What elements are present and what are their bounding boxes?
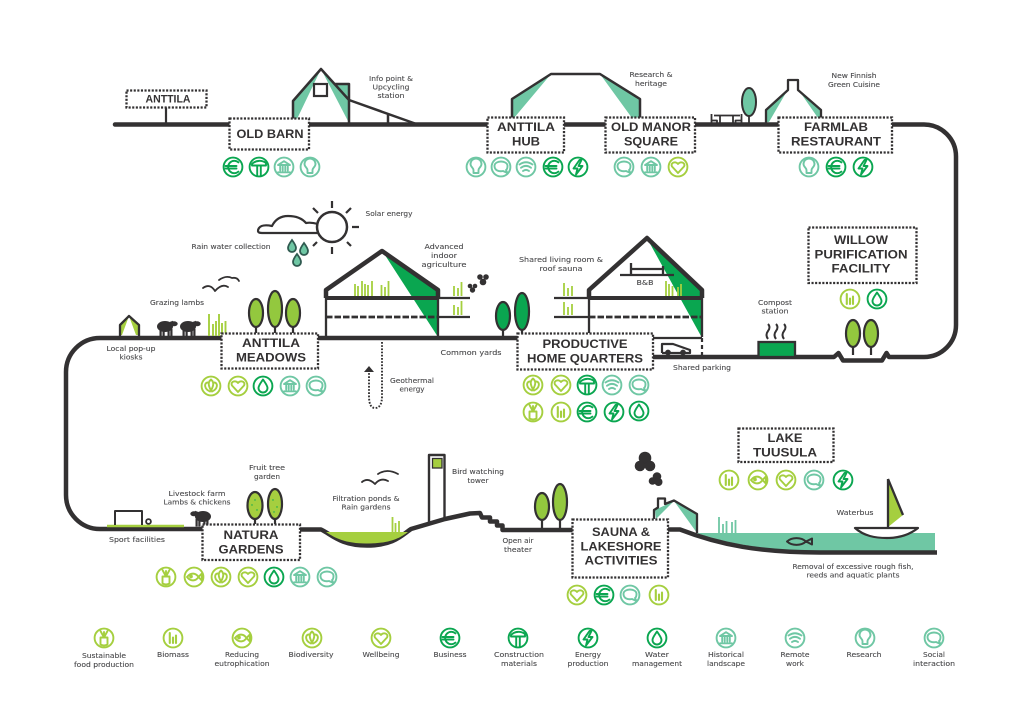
- label: Old Barn: OLD BARN: [236, 127, 304, 141]
- legend: research: [846, 629, 882, 659]
- legend: social interaction: [913, 629, 955, 668]
- caption: filtration ponds: Rain gardens: [342, 504, 391, 512]
- caption: open air theater: [502, 537, 534, 554]
- icon: willow trees: [846, 320, 878, 355]
- legend: social interaction: Social: [923, 651, 945, 659]
- label: Lake Tuusula: TUUSULA: [753, 446, 817, 460]
- legend: water management: [632, 629, 682, 668]
- legend: construction materials: materials: [501, 660, 538, 668]
- route line: top row to willow facility: [115, 124, 956, 360]
- icon row: old barn: [224, 158, 319, 176]
- icon: meadow trees: [249, 291, 300, 333]
- label: Anttila Meadows: MEADOWS: [236, 350, 306, 364]
- label: Lake Tuusula: [738, 428, 834, 462]
- icon: fruit trees: [248, 489, 282, 524]
- icon: meadow grass: [209, 314, 226, 336]
- caption: new finnish cuisine: New Finnish: [832, 72, 876, 80]
- label: Sauna and Lakeshore Activities: ACTIVITIES: [584, 554, 658, 568]
- caption: filtration ponds: [332, 495, 400, 512]
- caption: info point: station: [378, 92, 404, 100]
- filtration pond: [326, 532, 408, 544]
- legend: water management: Water: [645, 651, 669, 659]
- caption: research and heritage: [630, 71, 672, 88]
- legend: energy production: Energy: [575, 651, 601, 659]
- legend: historical landscape: [707, 629, 745, 668]
- caption: livestock farm: [164, 490, 231, 506]
- icon: common yard trees: [496, 293, 529, 338]
- label: Sauna and Lakeshore Activities: [572, 520, 668, 578]
- icon: theater trees: [535, 484, 567, 529]
- building: indoor agriculture house: [325, 251, 470, 337]
- legend: business: [434, 629, 467, 659]
- icon row: old manor: [615, 158, 687, 176]
- icon: compost bin: [758, 324, 795, 357]
- icon: rain drops: [288, 240, 308, 266]
- caption: lake removal: [792, 563, 914, 580]
- icon: birds: [203, 277, 239, 291]
- icon row: farmlab: [800, 158, 872, 176]
- icon: tree: [742, 88, 756, 124]
- icon row: lake: [720, 471, 852, 489]
- caption: grazing lambs: Grazing lambs: [150, 299, 205, 307]
- sign post: [165, 107, 167, 124]
- icon row: sauna: [568, 586, 668, 604]
- label: Willow Purification Facility: PURIFICATION: [814, 248, 908, 262]
- caption: research and heritage: heritage: [635, 80, 667, 88]
- legend: construction materials: [494, 629, 544, 668]
- caption: bird watching tower: [452, 468, 504, 485]
- legend: historical landscape: Historical: [708, 651, 744, 659]
- icon row: natura gardens: [157, 568, 336, 586]
- label: Anttila Hub: ANTTILA: [497, 120, 555, 134]
- caption: shared parking: Shared parking: [673, 364, 731, 372]
- icon: car: [662, 344, 690, 355]
- label: Farmlab Restaurant: RESTAURANT: [791, 134, 882, 148]
- caption: local kiosks: kiosks: [120, 354, 143, 362]
- caption: geothermal energy: energy: [400, 386, 425, 394]
- caption: new finnish cuisine: [828, 72, 880, 89]
- caption: info point: Upcycling: [372, 84, 410, 92]
- caption: local kiosks: Local pop-up: [106, 345, 156, 353]
- caption: lake removal: Removal of excessive rough fish,: [792, 563, 914, 571]
- legend: sustainable food production: Sustainable: [82, 652, 126, 660]
- caption: rain water collection: Rain water collection: [192, 243, 270, 251]
- label: Old Manor Square: [606, 118, 695, 152]
- legend: sustainable food production: [74, 629, 134, 669]
- icon rows: productive home: [524, 376, 648, 421]
- route line: shore: [666, 530, 937, 552]
- label: Productive Home Quarters: [518, 334, 653, 370]
- label: Anttila: ANTTILA: [146, 94, 191, 106]
- arrow: geothermal energy: [364, 342, 382, 408]
- building: farmlab: [766, 80, 821, 123]
- caption: lake removal: reeds and aquatic plants: [806, 572, 900, 580]
- label: Farmlab Restaurant: [778, 118, 892, 152]
- label: Anttila Meadows: ANTTILA: [242, 336, 300, 350]
- legend: construction materials: Construction: [494, 651, 544, 659]
- icon: birds: [362, 471, 398, 484]
- label: Anttila Meadows: [222, 334, 318, 368]
- legend: wellbeing: [362, 629, 400, 659]
- label: Natura Gardens: GARDENS: [218, 542, 284, 556]
- icon: picnic table: [712, 114, 742, 124]
- label: Anttila Hub: [488, 118, 564, 152]
- icon: sun and cloud: [258, 201, 359, 254]
- icon: kiosk: [120, 316, 139, 337]
- icon: butterflies: [468, 274, 489, 293]
- caption: filtration ponds: Filtration ponds &: [332, 495, 400, 503]
- building: productive home: [554, 238, 703, 356]
- building: Anttila hub and manor: [512, 74, 640, 118]
- caption: advanced indoor agriculture: [422, 243, 466, 269]
- caption: compost station: station: [762, 308, 788, 316]
- label: Old Manor Square: OLD MANOR: [611, 120, 691, 134]
- icon: lambs: [157, 321, 201, 336]
- caption: compost station: Compost: [758, 299, 792, 307]
- legend: reducing eutrophication: eutrophication: [214, 660, 270, 668]
- legend: research: Research: [846, 651, 882, 659]
- label: Productive Home Quarters: HOME QUARTERS: [527, 352, 643, 366]
- caption: solar energy: Solar energy: [366, 210, 413, 218]
- legend: water management: management: [632, 660, 682, 668]
- caption: fruit tree garden: [249, 464, 285, 481]
- label: Sauna and Lakeshore Activities: SAUNA &: [592, 525, 650, 539]
- caption: bed and breakfast: B&B: [636, 279, 654, 287]
- caption: compost station: [758, 299, 792, 316]
- caption: common yards: Common yards: [440, 349, 502, 357]
- caption: geothermal energy: [390, 377, 434, 394]
- legend: remote work: work: [786, 660, 804, 668]
- legend: energy production: [568, 629, 608, 668]
- label: Willow Purification Facility: [808, 228, 916, 283]
- icon: lamb: [190, 511, 211, 526]
- legend: social interaction: interaction: [913, 660, 955, 668]
- caption: waterbus: Waterbus: [836, 509, 874, 517]
- legend: historical landscape: landscape: [707, 660, 745, 668]
- caption: research and heritage: Research &: [630, 71, 672, 79]
- icon row: willow: [841, 290, 886, 308]
- icon row: Anttila hub: [467, 158, 587, 176]
- label: Old Barn: [230, 118, 309, 150]
- caption: new finnish cuisine: Green Cuisine: [828, 81, 880, 89]
- icon: fish: [787, 538, 812, 545]
- caption: advanced indoor agriculture: indoor: [431, 252, 457, 260]
- caption: livestock farm: Lambs & chickens: [164, 498, 231, 506]
- caption: shared living room: roof sauna: [540, 265, 582, 273]
- caption: open air theater: theater: [504, 546, 532, 554]
- caption: geothermal energy: Geothermal: [390, 377, 434, 385]
- lake water: [697, 533, 935, 551]
- route line: second row to left bend and third row: [66, 338, 518, 529]
- legend: biomass: [157, 629, 190, 659]
- caption: bird watching tower: Bird watching: [452, 468, 504, 476]
- caption: open air theater: Open air: [502, 537, 534, 545]
- legend: energy production: production: [568, 660, 608, 668]
- caption: bird watching tower: tower: [468, 477, 489, 485]
- route line: pond, hill and steps: [298, 513, 574, 546]
- label: Lake Tuusula: LAKE: [768, 431, 802, 445]
- label: Natura Gardens: NATURA: [224, 528, 279, 542]
- caption: info point: [369, 75, 413, 100]
- building: sauna: [654, 498, 697, 533]
- label: Sauna and Lakeshore Activities: LAKESHORE: [580, 540, 662, 554]
- icon row: meadows: [202, 377, 325, 395]
- label: Old Manor Square: SQUARE: [624, 134, 678, 148]
- icon: waterbus: [855, 479, 918, 538]
- icon: sauna smoke: [635, 452, 662, 486]
- legend: reducing eutrophication: Reducing: [225, 651, 259, 659]
- label: Anttila Hub: HUB: [512, 134, 540, 148]
- label: Willow Purification Facility: FACILITY: [832, 262, 890, 276]
- caption: shared living room: [519, 256, 603, 273]
- legend: remote work: Remote: [780, 651, 810, 659]
- legend: business: Business: [434, 651, 467, 659]
- legend: reducing eutrophication: [214, 629, 270, 668]
- label: Anttila: [126, 90, 206, 108]
- legend: biodiversity: [288, 629, 334, 659]
- icon: pond grass: [392, 517, 399, 532]
- legend: biodiversity: Biodiversity: [288, 651, 334, 659]
- caption: info point: Info point &: [369, 75, 413, 83]
- legend: wellbeing: Wellbeing: [362, 651, 400, 659]
- label: Willow Purification Facility: WILLOW: [834, 233, 889, 247]
- label: Natura Gardens: [202, 524, 300, 560]
- label: Farmlab Restaurant: FARMLAB: [804, 120, 868, 134]
- caption: livestock farm: Livestock farm: [168, 490, 226, 498]
- caption: advanced indoor agriculture: Advanced: [424, 243, 464, 251]
- caption: advanced indoor agriculture: agriculture: [422, 261, 466, 269]
- label: Productive Home Quarters: PRODUCTIVE: [542, 337, 628, 351]
- building: old barn: [293, 69, 415, 124]
- legend: biomass: Biomass: [157, 651, 190, 659]
- caption: shared living room: Shared living room &: [519, 256, 603, 264]
- caption: sport facilities: Sport facilities: [109, 536, 166, 544]
- caption: fruit tree garden: garden: [254, 473, 280, 481]
- caption: fruit tree garden: Fruit tree: [249, 464, 285, 472]
- caption: local kiosks: [106, 345, 156, 362]
- icon: shore reeds: [719, 517, 736, 534]
- icon: sport field: [107, 511, 184, 526]
- icon: bird watching tower: [429, 455, 444, 524]
- legend: remote work: [780, 629, 810, 668]
- legend: sustainable food production: food production: [74, 661, 134, 669]
